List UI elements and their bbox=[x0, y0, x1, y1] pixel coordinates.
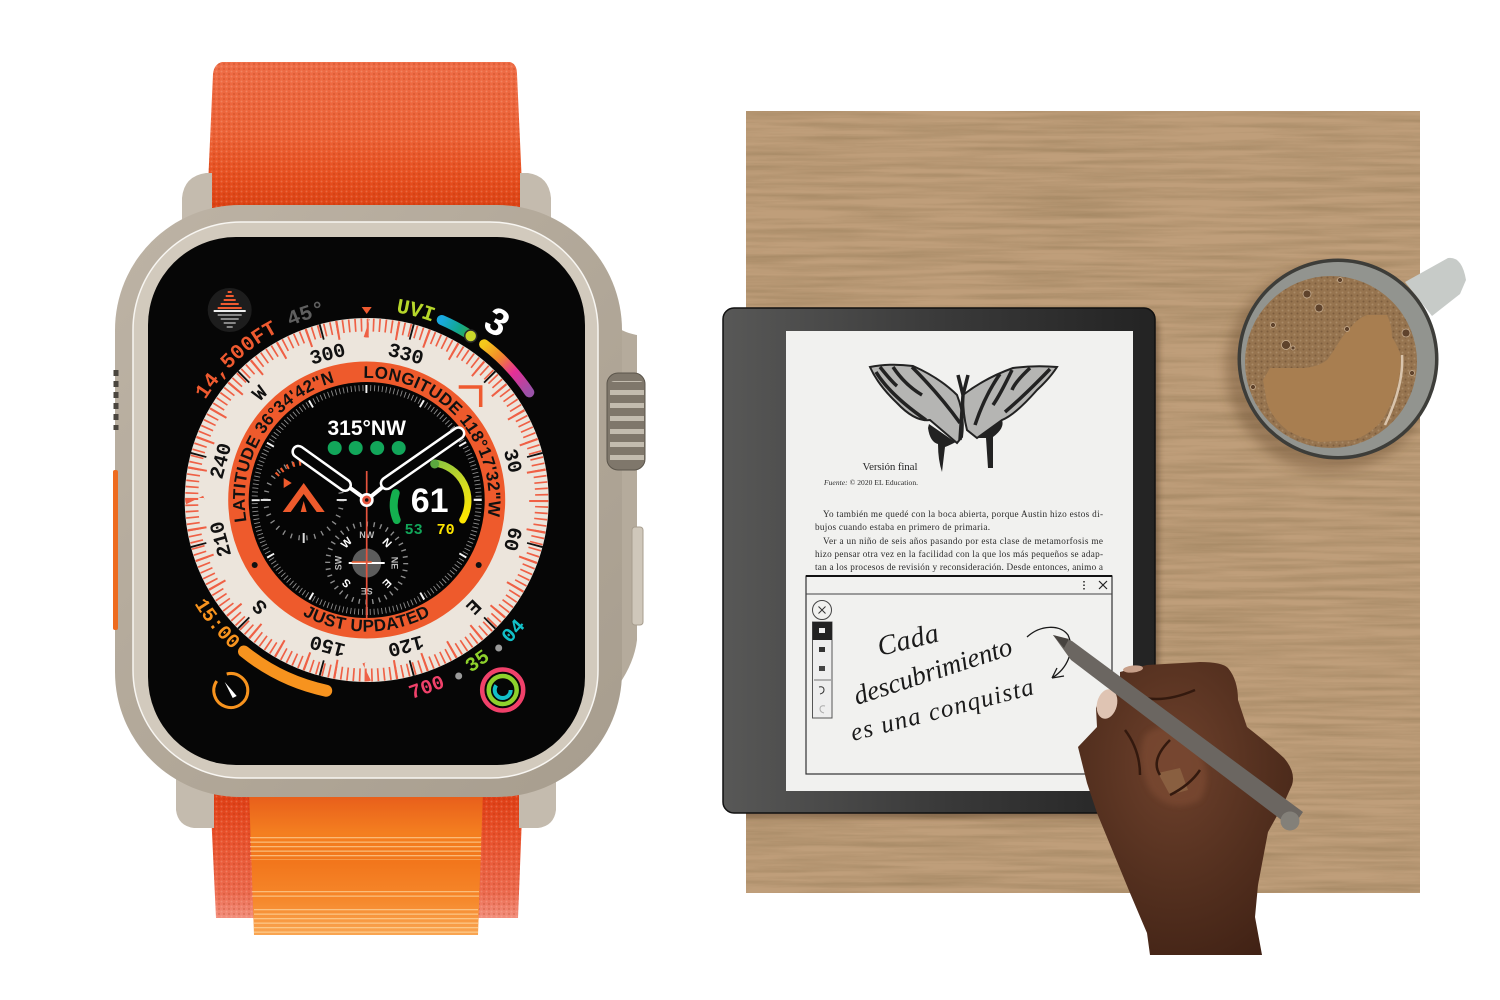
bezel labels: 330 bbox=[385, 340, 426, 371]
timer label: 15:00 bbox=[195, 598, 239, 648]
handwritten note: Cada bbox=[874, 618, 942, 663]
bezel tick ring bbox=[192, 325, 542, 675]
coordinates text: JUST UPDATED bbox=[304, 606, 428, 632]
crown guard and case side bbox=[590, 300, 637, 690]
palm shading bbox=[1141, 727, 1206, 806]
top triangle bbox=[362, 307, 372, 314]
tablet screen bbox=[786, 331, 1133, 791]
side button bbox=[632, 527, 643, 625]
crown bbox=[607, 373, 645, 470]
hand holding stylus bbox=[1053, 635, 1303, 955]
bezel labels: 300 bbox=[308, 340, 348, 371]
altimeter icon bbox=[208, 288, 252, 332]
compass subdial: NE bbox=[390, 557, 400, 569]
watch band top bbox=[207, 62, 523, 208]
orange coordinates ring bbox=[239, 372, 495, 628]
coordinates text bbox=[232, 366, 501, 632]
index finger nail bbox=[1123, 664, 1143, 674]
page paragraph: Ver a un niño de seis años pasando por esta clase de metamorfosis me bbox=[823, 536, 1103, 546]
activity values: 700 bbox=[406, 672, 448, 706]
heading dots bbox=[328, 441, 406, 455]
compass subdial: NW bbox=[359, 530, 375, 540]
swirl highlight bbox=[1385, 355, 1402, 425]
coffee cup bbox=[1226, 258, 1466, 472]
activity separators bbox=[455, 644, 502, 680]
seconds hand bbox=[366, 471, 368, 618]
bezel labels: 210 bbox=[207, 518, 238, 559]
cup shadow bbox=[1226, 264, 1434, 472]
coordinates text: LONGITUDE 118°17'32"W bbox=[364, 366, 501, 518]
body and antennae bbox=[958, 375, 968, 440]
uv gauge bbox=[442, 320, 529, 392]
tablet body bbox=[723, 308, 1155, 813]
cup rim bbox=[1238, 258, 1438, 460]
uv number: 3 bbox=[477, 299, 516, 346]
red corner marker bbox=[459, 387, 481, 407]
bezel labels: 60 bbox=[497, 524, 525, 553]
minute hand bbox=[367, 433, 458, 500]
centre pivot bbox=[360, 493, 374, 507]
bezel labels: W bbox=[249, 382, 273, 407]
window close icon bbox=[1099, 581, 1107, 589]
case inner bezel bbox=[133, 222, 598, 778]
wing stripes bbox=[876, 367, 1050, 425]
bezel labels bbox=[207, 340, 525, 660]
compass subdial: W bbox=[339, 535, 355, 551]
speaker slits bbox=[114, 370, 118, 430]
right wing bbox=[963, 366, 1057, 438]
finger creases bbox=[1125, 690, 1200, 795]
notebook window bbox=[806, 576, 1112, 774]
compass subdial: SW bbox=[334, 555, 344, 570]
page paragraph: bujos cuando estaba en primero de primaria. bbox=[815, 522, 990, 532]
activity gauge: 53 bbox=[405, 522, 423, 539]
activity rings icon bbox=[482, 670, 523, 710]
handwritten note: descubrimiento bbox=[850, 631, 1016, 711]
watch screen bbox=[148, 237, 585, 765]
altitude readout: 14,500FT bbox=[196, 320, 274, 399]
tablet shadow bbox=[733, 316, 1159, 818]
bezel labels: E bbox=[460, 593, 485, 618]
thumb nail bbox=[1094, 687, 1120, 721]
bezel labels: 30 bbox=[497, 447, 525, 476]
compass subdial: SE bbox=[361, 586, 373, 596]
bezel labels: 120 bbox=[385, 629, 426, 660]
watch band bottom bbox=[210, 790, 523, 935]
ring dots bbox=[252, 562, 482, 568]
watch lugs bbox=[176, 173, 556, 828]
compass subdial: S bbox=[340, 576, 354, 590]
compass subdial: E bbox=[380, 576, 393, 590]
bezel labels: 150 bbox=[308, 629, 348, 660]
page paragraph: Yo también me quedé con la boca abierta, porque Austin hizo estos di- bbox=[823, 509, 1103, 519]
foam bubbles bbox=[1250, 278, 1414, 390]
cup handle bbox=[1405, 258, 1466, 316]
page paragraph bbox=[815, 509, 1103, 572]
watch bbox=[113, 62, 646, 935]
heading readout: 315°NW bbox=[327, 417, 406, 440]
inner ticks bbox=[255, 388, 479, 612]
hind wings and tails bbox=[928, 420, 1003, 472]
left subdial with tent icon bbox=[261, 462, 347, 543]
activity values: 35 bbox=[462, 646, 495, 679]
hour hand bbox=[298, 452, 367, 500]
timer icon bbox=[214, 673, 248, 707]
activity gauge: 61 bbox=[411, 482, 449, 520]
e-reader tablet bbox=[723, 308, 1159, 818]
compass bezel disc bbox=[185, 318, 549, 682]
milk swirl bbox=[1263, 315, 1401, 442]
page caption: Versión final bbox=[862, 461, 918, 473]
bezel labels: S bbox=[249, 593, 273, 618]
hand-drawn arrow bbox=[1027, 627, 1071, 678]
wood surface bbox=[746, 111, 1420, 893]
hand bbox=[1078, 662, 1293, 955]
compass subdial bbox=[328, 524, 406, 602]
activity values bbox=[406, 615, 531, 706]
coordinates text: LATITUDE 36°34'42"N bbox=[232, 371, 334, 522]
action button bbox=[113, 470, 118, 630]
left wing bbox=[870, 365, 963, 443]
handwritten note: es una conquista bbox=[848, 674, 1037, 747]
bezel labels: 240 bbox=[207, 441, 238, 482]
compass subdial: N bbox=[379, 536, 394, 550]
timer arc bbox=[244, 652, 326, 691]
activity gauge bbox=[394, 460, 468, 539]
finger gap bbox=[1158, 768, 1188, 795]
window menu icon bbox=[1083, 581, 1085, 590]
watch case bbox=[115, 205, 622, 797]
page paragraph: hizo pensar otra vez en la facilidad con la que los más pequeños se adap- bbox=[815, 549, 1103, 559]
inner dial bbox=[249, 382, 485, 618]
page source: Fuente: © 2020 EL Education. bbox=[823, 478, 918, 487]
stylus bbox=[1053, 635, 1303, 830]
activity gauge: 70 bbox=[437, 522, 455, 539]
uv label: UVI bbox=[398, 298, 436, 322]
butterfly illustration bbox=[870, 365, 1057, 472]
watch face bbox=[184, 288, 549, 713]
handwritten note bbox=[848, 618, 1071, 747]
coffee foam bbox=[1245, 276, 1417, 448]
temperature readout: 45° bbox=[289, 302, 320, 324]
activity values: 04 bbox=[498, 615, 531, 649]
page paragraph: tan a los procesos de revisión y reconsideración. Desde entonces, animo a bbox=[815, 562, 1103, 572]
toolbar bbox=[812, 600, 832, 718]
